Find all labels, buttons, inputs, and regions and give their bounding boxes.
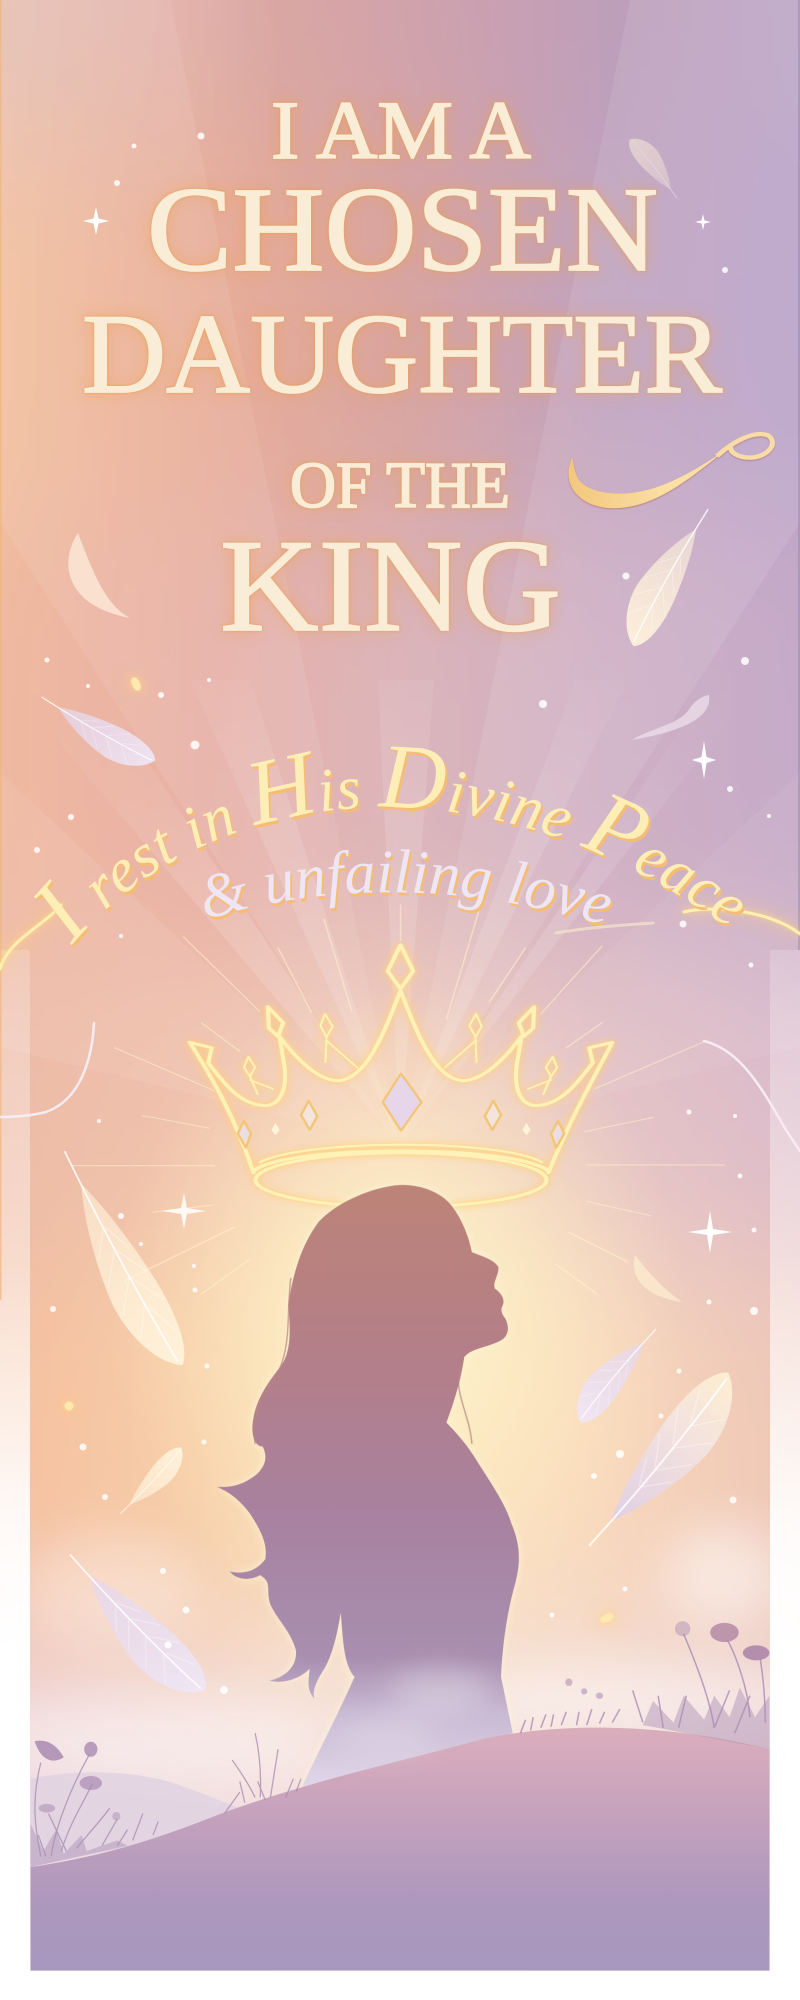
crown band xyxy=(256,1153,546,1207)
feather: lower left lavender xyxy=(51,1539,217,1713)
star: right of halo xyxy=(688,1211,732,1253)
back hill xyxy=(31,1772,265,1867)
small inner spikes xyxy=(244,1014,557,1094)
feather: large right xyxy=(570,1362,757,1565)
clouds xyxy=(0,1525,800,1785)
subtitle line 2: & unfailing love xyxy=(204,849,613,926)
star: top right xyxy=(695,214,711,230)
plants: left xyxy=(35,1634,765,1856)
feather: upper right cream xyxy=(609,498,725,653)
title xyxy=(82,84,723,659)
title line: KING: KING xyxy=(220,512,561,659)
flowers: left xyxy=(35,1741,64,1761)
star: top left xyxy=(83,207,109,235)
title line: I AM A: I AM A xyxy=(271,84,531,176)
fog over lower body xyxy=(356,1660,488,1744)
crown gems xyxy=(238,1074,564,1148)
curved light lines xyxy=(0,905,800,1151)
feather: right small lavender xyxy=(632,695,709,740)
star: right mid xyxy=(692,741,716,779)
feather: left lavender xyxy=(32,684,161,780)
feather: small right crescent xyxy=(634,1255,682,1302)
sun rays xyxy=(144,680,628,1080)
feather: large cream left xyxy=(41,1141,196,1381)
grass tufts xyxy=(31,1688,769,1867)
halo glow behind figure xyxy=(166,1064,618,1478)
star sparkles xyxy=(83,207,732,1253)
subtitle script text xyxy=(34,746,744,948)
woman silhouette xyxy=(217,1185,519,1789)
crown outline xyxy=(190,991,612,1173)
hair wisps xyxy=(254,1278,472,1444)
left point diamond xyxy=(268,1007,283,1036)
foreground hill xyxy=(31,1728,769,1971)
orange glints xyxy=(64,676,615,1625)
title line: CHOSEN: CHOSEN xyxy=(147,163,658,297)
right point diamond xyxy=(519,1007,534,1036)
flowers: right xyxy=(710,1623,739,1642)
icon: glowing crown xyxy=(190,945,612,1207)
feather: upper left crescent xyxy=(68,533,130,618)
feather: small left cream xyxy=(112,1442,193,1523)
title line: OF THE: OF THE xyxy=(290,449,510,522)
silhouette and foreground xyxy=(31,1185,769,1971)
crown tip diamond xyxy=(388,945,413,989)
plants: right xyxy=(520,1634,765,1733)
feathers xyxy=(32,130,757,1713)
subtitle line 1: I rest in His Divine Peace xyxy=(34,746,744,948)
lower light lines xyxy=(125,1227,628,1294)
icon: gold swash xyxy=(568,434,772,508)
sparkle dots xyxy=(34,132,771,1694)
feather: top right xyxy=(624,130,687,205)
crown radiating light lines xyxy=(71,905,724,1216)
star: left of halo xyxy=(162,1193,206,1229)
title line: DAUGHTER: DAUGHTER xyxy=(82,292,723,417)
feather: right lavender xyxy=(563,1317,668,1429)
